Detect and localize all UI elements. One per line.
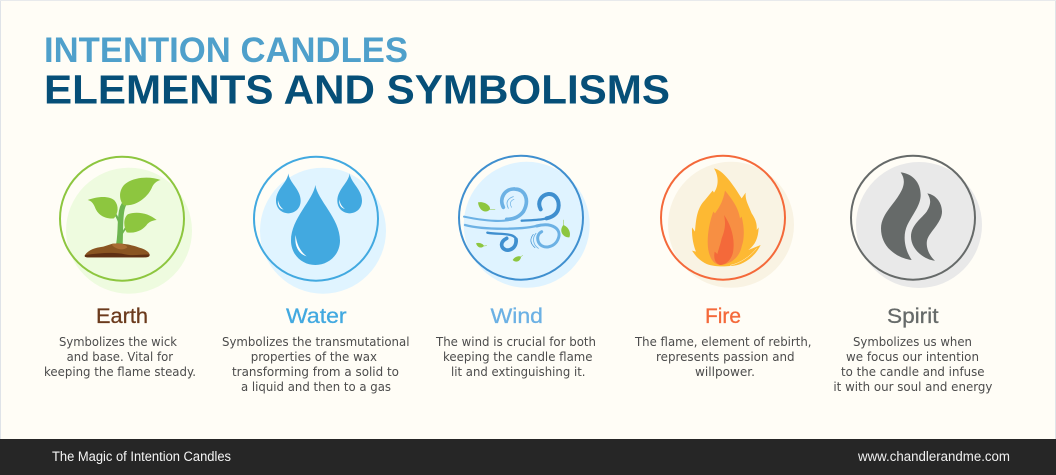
footer title: The Magic of Intention Candles [52,449,231,464]
footer url: www.chandlerandme.com [857,449,1010,464]
heading: water: Water [286,305,347,328]
text: spirit description: Symbolizes us when [853,335,972,349]
text: water description [222,335,410,394]
text: wind description [435,335,596,379]
text: spirit description [833,335,992,394]
text: spirit description: it with our soul and energy [833,380,992,394]
panel: wind [435,156,596,379]
text: earth description [44,335,196,379]
heading: spirit: Spirit [887,305,939,328]
icon: water drops [254,157,386,294]
icon: flame [661,156,794,288]
icon: spirit wisps [851,156,982,288]
panel: water [222,157,410,394]
text: wind description: lit and extinguishing it. [451,365,586,379]
panel: spirit [833,156,992,394]
text: fire description [634,335,812,379]
text: earth description: Symbolizes the wick [59,335,178,349]
text: water description: transforming from a solid to [232,365,399,379]
heading: fire: Fire [705,305,741,328]
title: ELEMENTS AND SYMBOLISMS [44,66,670,112]
text: spirit description: to the candle and infuse [841,365,984,379]
heading: wind: Wind [490,305,543,328]
text: water description: a liquid and then to a gas [241,380,391,394]
heading: earth: Earth [96,305,148,328]
text: earth description: keeping the flame steady. [44,365,196,379]
icon: earth plant [60,157,192,294]
panel: fire [634,156,812,379]
title [44,31,670,112]
text: water description: Symbolizes the transmutational [222,335,410,349]
text: earth description: and base. Vital for [67,350,174,364]
icon: wind swirls and leaves [459,156,590,288]
text: spirit description: we focus our intention [846,350,979,364]
panel: earth [44,157,196,379]
text: fire description: represents passion and [656,350,795,364]
title: INTENTION CANDLES [44,31,408,70]
text: fire description: willpower. [695,365,755,379]
footer bar [0,439,1056,475]
text: fire description: The flame, element of rebirth, [634,335,812,349]
text: wind description: keeping the candle flame [443,350,592,364]
text: wind description: The wind is crucial for both [435,335,596,349]
text: water description: properties of the wax [251,350,377,364]
